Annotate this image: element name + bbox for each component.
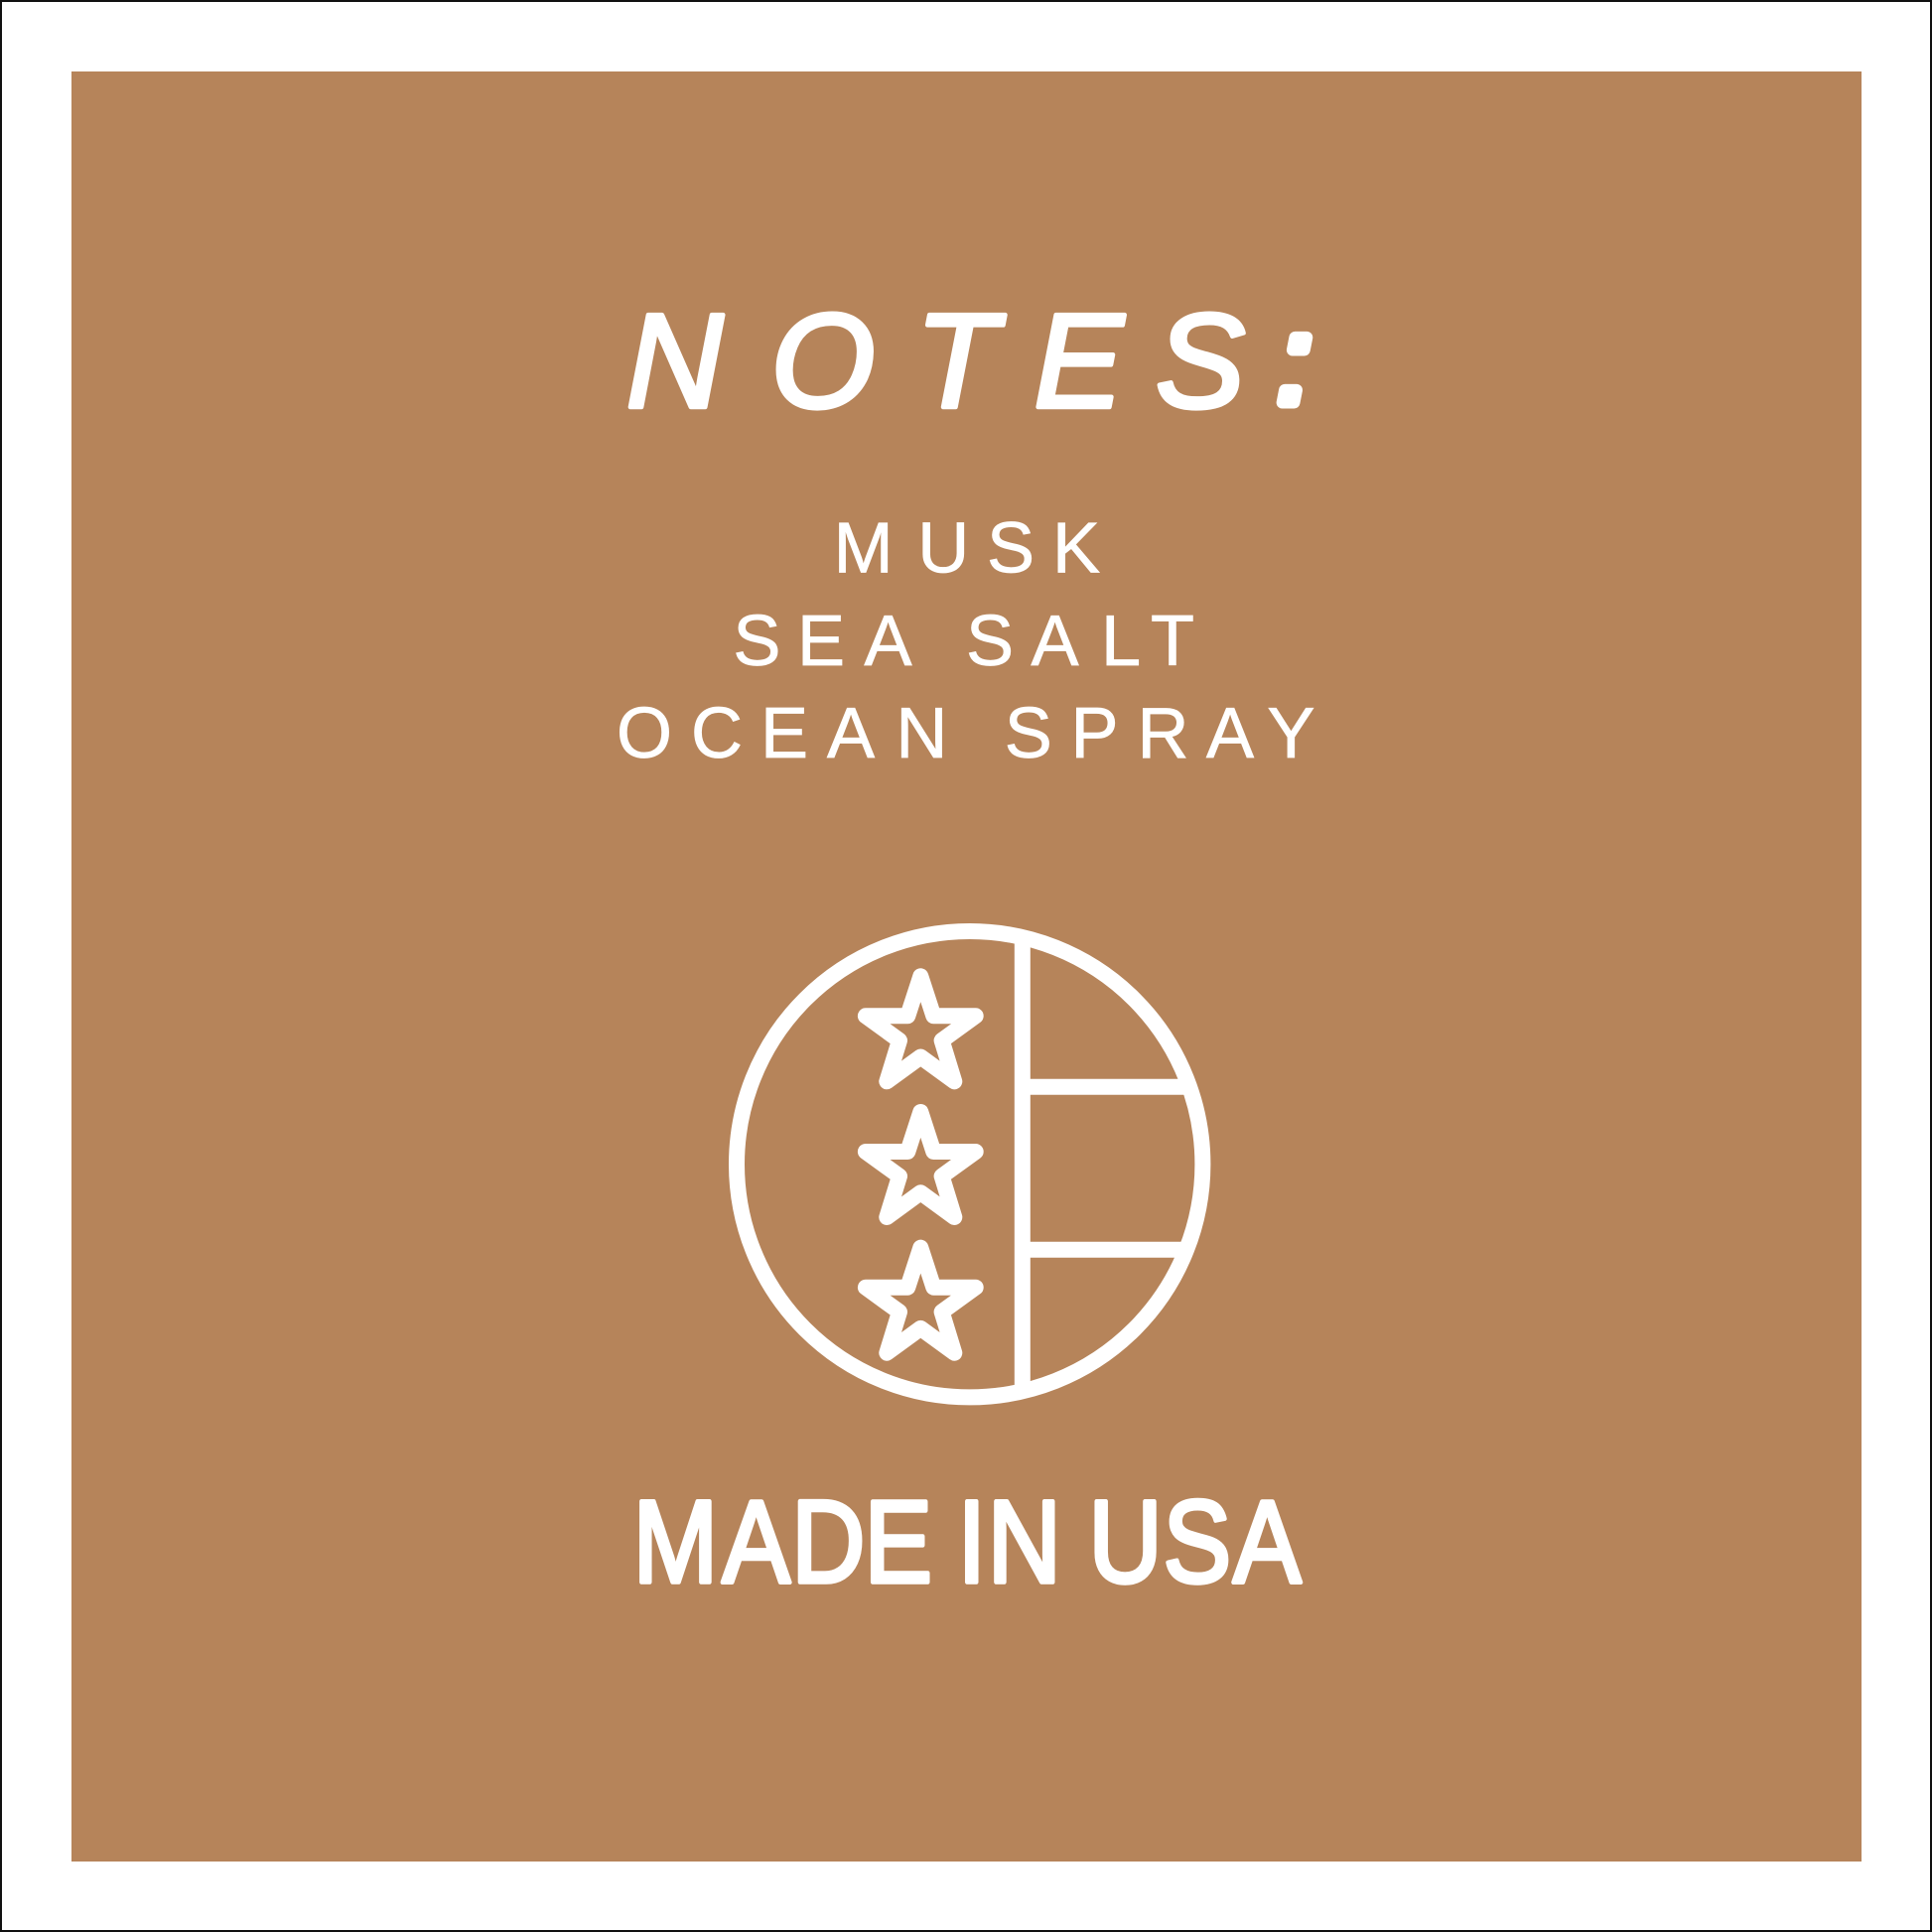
note: ocean spray: OCEAN SPRAY bbox=[617, 694, 1314, 773]
notes list bbox=[617, 508, 1314, 773]
star 2 bbox=[866, 1112, 976, 1217]
icon dividers bbox=[1023, 937, 1189, 1391]
icon: stars bbox=[866, 976, 976, 1353]
icon ring bbox=[737, 931, 1202, 1397]
title: NOTES: NOTES bbox=[626, 286, 1245, 436]
title: NOTES: : bbox=[1278, 293, 1311, 430]
note: musk: MUSK bbox=[834, 508, 1100, 588]
star 3 bbox=[866, 1248, 976, 1353]
footer: MADE IN USA: MADE IN USA bbox=[633, 1477, 1302, 1607]
icon: circle with three stars and divided panels bbox=[737, 931, 1202, 1397]
note: sea salt: SEA SALT bbox=[733, 602, 1194, 681]
star 1 bbox=[866, 976, 976, 1081]
